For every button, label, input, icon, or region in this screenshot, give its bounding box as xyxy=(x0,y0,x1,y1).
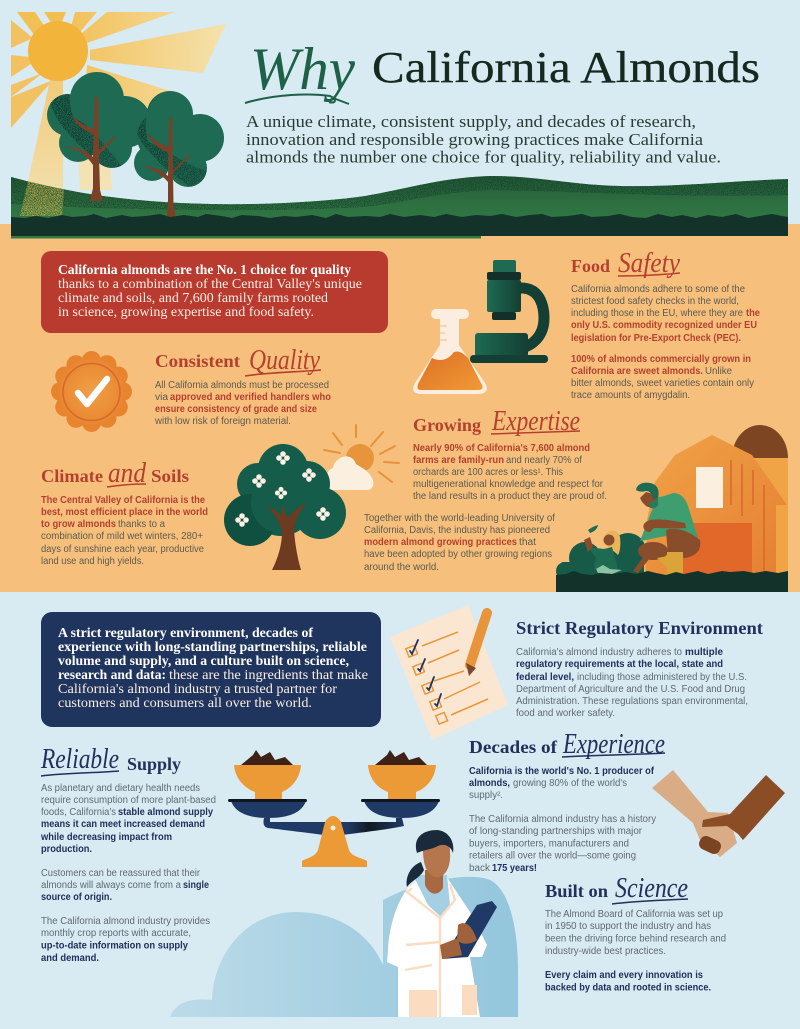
text: decades of experience body: growing 80% of the world's xyxy=(513,778,627,789)
section: growing expertise xyxy=(364,405,607,573)
heading: growing expertise xyxy=(413,405,580,437)
intro paragraph: A unique climate, consistent supply, and decades of research, xyxy=(246,112,696,131)
text: strict regulatory body: including those administered by the U.S. xyxy=(577,672,747,683)
panel: red quality callout: climate and soils, and 7,600 family farms rooted xyxy=(58,290,328,305)
text: decades of experience body: of long-standing partnerships with major xyxy=(469,826,643,837)
text: reliable supply body: single xyxy=(183,880,210,891)
panel: navy partner callout xyxy=(41,612,381,727)
panel: red quality callout: California almonds are the No. 1 choice for quality xyxy=(58,262,351,277)
intro paragraph: innovation and responsible growing practices make California xyxy=(246,130,704,149)
illustration: sun with rays xyxy=(11,12,226,190)
section: reliable supply xyxy=(40,743,216,964)
text: built on science body: industry-wide best practices. xyxy=(545,946,666,957)
text: built on science body: been the driving force behind research and xyxy=(545,934,726,944)
text: consistent quality body: via xyxy=(155,392,169,403)
text: growing expertise body xyxy=(364,443,607,573)
text: food safety body: California are sweet almonds. xyxy=(571,366,703,377)
heading: growing expertise: Expertise xyxy=(491,405,580,437)
text: growing expertise body: have been adopted by other growing regions xyxy=(364,549,552,560)
text: strict regulatory body: Administration. These regulations span environmental, xyxy=(516,696,748,707)
text: climate and soils body: thanks to a xyxy=(118,519,166,530)
text: consistent quality body xyxy=(154,380,331,427)
text: strict regulatory body: food and worker safety. xyxy=(516,708,615,719)
panel: navy partner callout: experience with long-standing partnerships, reliable xyxy=(58,639,367,654)
text: food safety body: legislation for Pre-Export Check (PEC). xyxy=(571,333,741,344)
text: strict regulatory body: regulatory requirements at the local, state and xyxy=(516,659,723,670)
intro paragraph xyxy=(246,112,721,166)
farmer xyxy=(633,483,700,576)
illustration: barn and silo xyxy=(645,425,788,576)
text: food safety body: strictest food safety checks in the world, xyxy=(571,296,739,307)
illustration: scientist xyxy=(387,830,497,1017)
illustration: flask xyxy=(413,309,487,394)
text: decades of experience body: 175 years! xyxy=(492,863,537,874)
heading: climate and soils: Climate xyxy=(41,466,103,486)
intro paragraph: almonds the number one choice for quality, reliability and value. xyxy=(246,148,721,166)
text: reliable supply body: foods, California's xyxy=(41,807,116,818)
text: decades of experience body: California is the world's No. 1 producer of xyxy=(469,766,655,777)
heading: climate and soils: and xyxy=(108,457,146,489)
text: climate and soils body: to grow almonds xyxy=(41,519,116,530)
section: food safety xyxy=(571,247,761,401)
text: reliable supply body: while decreasing impact from xyxy=(40,832,172,843)
text: food safety body: Unlike xyxy=(705,366,732,377)
text: decades of experience body: supply². xyxy=(469,790,503,801)
heading: reliable supply xyxy=(40,743,181,776)
text: climate and soils body xyxy=(41,495,208,567)
panel: navy partner callout: A strict regulatory environment, decades of xyxy=(58,625,313,640)
text: consistent quality body: with low risk of foreign material. xyxy=(154,416,291,427)
text: food safety body: 100% of almonds commercially grown in xyxy=(571,354,751,365)
text: growing expertise body: that xyxy=(519,537,536,548)
text: consistent quality body: approved and verified handlers who xyxy=(170,392,331,403)
text: food safety body: including those in the EU, where they are xyxy=(571,308,743,319)
section: strict regulatory environment xyxy=(516,618,763,719)
text: growing expertise body: and nearly 70% of xyxy=(506,455,582,466)
heading: built on science: Science xyxy=(615,872,688,904)
text: built on science body: The Almond Board of California was set up xyxy=(545,909,723,920)
text: decades of experience body xyxy=(469,766,656,874)
illustration: farmer and child gardening xyxy=(556,483,700,580)
illustration: dark ground xyxy=(556,571,788,592)
text: growing expertise body: Nearly 90% of California's 7,600 almond xyxy=(413,443,590,454)
text: decades of experience body: back xyxy=(469,863,490,874)
text: strict regulatory body: federal level, xyxy=(516,672,574,683)
text: climate and soils body: land use and high yields. xyxy=(41,556,144,567)
illustration: balance scale with almonds xyxy=(228,750,440,867)
text: food safety body: bitter almonds, sweet varieties contain only xyxy=(571,378,754,389)
text: decades of experience body: retailers all over the world—some going xyxy=(469,850,636,862)
text: food safety body: California almonds adhere to some of the xyxy=(571,284,745,295)
text: food safety body: trace amounts of amygdalin. xyxy=(571,390,690,401)
text: consistent quality body: ensure consistency of grade and size xyxy=(155,404,318,415)
text: growing expertise body: around the world. xyxy=(364,562,439,573)
text: reliable supply body: almonds will always come from a xyxy=(41,880,182,891)
heading: decades of experience: Decades of xyxy=(469,737,558,757)
illustration: sun and cloud xyxy=(324,425,399,490)
illustration: dark foreground grass xyxy=(11,214,788,236)
heading: growing expertise: Growing xyxy=(413,415,481,435)
panel: navy partner callout: California's almond industry a trusted partner for xyxy=(58,681,337,696)
text: built on science body xyxy=(545,909,726,994)
heading: food safety: Safety xyxy=(618,247,680,279)
text: reliable supply body xyxy=(40,783,216,964)
icon: quality badge with check xyxy=(51,351,132,432)
text: growing expertise body: modern almond growing practices xyxy=(364,537,517,548)
text: reliable supply body: stable almond supply xyxy=(118,807,214,818)
child xyxy=(584,525,622,574)
section: decades of experience xyxy=(469,728,665,874)
heading: reliable supply: Reliable xyxy=(40,743,119,775)
panel: navy partner callout: these are the ingredients that make xyxy=(169,667,368,682)
panel: navy partner callout: customers and consumers all over the world. xyxy=(58,695,312,710)
text: built on science body: backed by data and rooted in science. xyxy=(545,982,711,994)
heading: climate and soils xyxy=(41,457,189,489)
illustration: hills xyxy=(11,176,788,238)
heading: built on science xyxy=(545,872,688,904)
text: decades of experience body: buyers, importers, manufacturers and xyxy=(469,838,629,850)
icon: blossoms xyxy=(235,451,330,527)
section: consistent quality xyxy=(154,344,331,427)
illustration: almond blossom tree xyxy=(224,444,346,570)
panel: red quality callout: thanks to a combination of the Central Valley's unique xyxy=(58,276,362,291)
text: strict regulatory body: California's almond industry adheres to xyxy=(516,647,682,658)
heading: food safety xyxy=(571,247,680,279)
illustration: microscope xyxy=(470,260,548,363)
text: climate and soils body: days of sunshine each year, productive xyxy=(41,544,204,555)
text: food safety body xyxy=(571,284,761,401)
text: reliable supply body: source of origin. xyxy=(41,892,112,903)
text: growing expertise body: orchards are 100 acres or less¹. This xyxy=(413,467,563,478)
icon: handshake xyxy=(652,770,785,857)
title main words: California Almonds xyxy=(372,43,760,92)
text: food safety body: only U.S. commodity recognized under EU xyxy=(571,320,757,331)
heading: climate and soils: Soils xyxy=(151,466,189,486)
heading: strict regulatory environment: Strict Regulatory Environment xyxy=(516,618,763,638)
panel: navy partner callout: volume and supply, and a culture built on science, xyxy=(58,653,349,668)
heading: food safety: Food xyxy=(571,256,610,276)
illustration: blue cloud backdrop xyxy=(170,877,518,1017)
illustration: checklist and pencil xyxy=(390,605,508,740)
text: food safety body: the xyxy=(746,308,761,319)
heading: consistent quality: Consistent xyxy=(155,351,240,371)
text: reliable supply body: means it can meet increased demand xyxy=(41,819,205,830)
text: reliable supply body: Customers can be reassured that their xyxy=(41,868,201,879)
heading: consistent quality: Quality xyxy=(249,344,320,376)
text: strict regulatory body: multiple xyxy=(685,647,724,658)
heading: decades of experience: Experience xyxy=(562,728,665,760)
heading: reliable supply: Supply xyxy=(127,754,181,774)
section: built on science xyxy=(545,872,726,994)
heading: consistent quality xyxy=(155,344,321,376)
text: reliable supply body: monthly crop reports with accurate, xyxy=(41,928,191,939)
text: reliable supply body: production. xyxy=(41,844,92,855)
text: climate and soils body: combination of mild wet winters, 280+ xyxy=(41,531,203,542)
heading: built on science: Built on xyxy=(545,881,608,901)
text: reliable supply body: The California almond industry provides xyxy=(41,916,210,927)
title script word: Why: Why xyxy=(250,36,355,102)
text: reliable supply body: and demand. xyxy=(41,953,99,964)
illustration: right tree xyxy=(130,91,224,217)
heading: decades of experience xyxy=(469,728,665,760)
text: built on science body: Every claim and every innovation is xyxy=(545,970,703,981)
panel: red quality callout: in science, growing expertise and food safety. xyxy=(58,304,314,319)
text: reliable supply body: require consumption of more plant-based xyxy=(41,795,216,806)
text: growing expertise body: Together with the world-leading University of xyxy=(364,513,555,524)
text: growing expertise body: California, Davis, the industry has pioneered xyxy=(364,525,550,536)
text: consistent quality body: All California almonds must be processed xyxy=(155,380,329,391)
text: reliable supply body: up-to-date information on supply xyxy=(41,940,189,952)
illustration: left tree xyxy=(47,72,151,201)
text: strict regulatory body xyxy=(516,647,748,719)
text: reliable supply body: As planetary and dietary health needs xyxy=(41,783,200,794)
background: orange band xyxy=(0,224,800,592)
text: decades of experience body: The California almond industry has a history xyxy=(469,814,656,825)
bushes xyxy=(556,533,646,580)
text: decades of experience body: almonds, xyxy=(469,778,510,789)
panel: red quality callout xyxy=(41,251,388,333)
text: climate and soils body: The Central Valley of California is the xyxy=(41,495,206,506)
text: built on science body: in 1950 to support the industry and has xyxy=(545,921,711,932)
text: growing expertise body: farms are family-run xyxy=(413,455,504,466)
title xyxy=(245,36,760,104)
panel: navy partner callout: research and data: xyxy=(58,667,166,682)
text: strict regulatory body: Department of Agriculture and the U.S. Food and Drug xyxy=(516,684,745,695)
text: growing expertise body: multigenerational knowledge and respect for xyxy=(413,479,604,490)
text: growing expertise body: the land results in a product they are proud of. xyxy=(413,491,607,502)
text: climate and soils body: best, most efficient place in the world xyxy=(41,507,208,518)
section: climate and soils xyxy=(41,457,208,567)
